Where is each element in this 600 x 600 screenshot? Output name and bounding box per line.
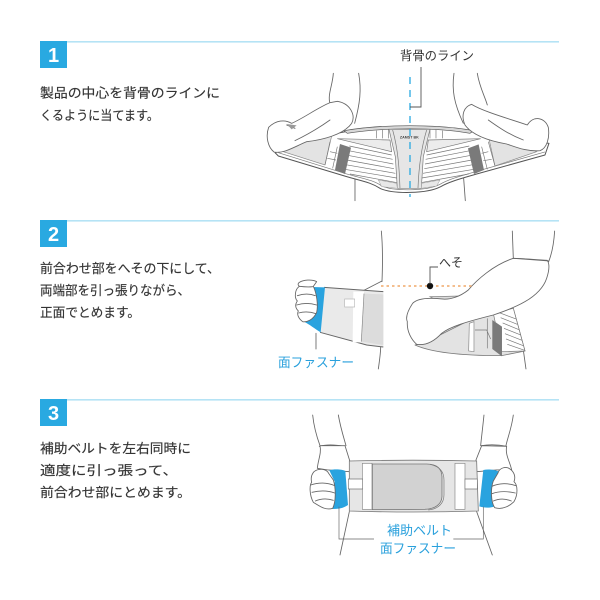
left fist [310,469,335,509]
step 1 number badge [40,41,67,68]
belt [349,460,478,512]
step 2 number badge [40,220,67,247]
step 3 instruction text: 適度に引っ張って、 [40,463,178,478]
upper hands [317,446,350,472]
panel: step 3 [40,399,559,556]
navel leader line [430,267,438,284]
panel: step 2 [40,220,559,370]
right fist [491,468,517,508]
step 2 instruction text: 両端部を引っ張りながら、 [40,283,190,298]
step 3 instruction text [40,441,191,500]
step 3 instruction text: 補助ベルトを左右同時に [40,441,191,456]
step 1 instruction text: 製品の中心を背骨のラインに [40,86,220,100]
belt body: ZAMST BK [400,136,419,140]
navel dotted line [381,285,474,287]
step 3 number badge: 3 [48,403,59,425]
label: fastener, blue: 面ファスナー [380,541,456,556]
illustration: pulling support belts, front view [310,415,517,555]
illustration: fastening the belt, side view [295,231,555,369]
navel dot [427,283,433,289]
right arm [463,104,549,151]
illustration: belt on back aligned to spine [267,73,549,201]
step 2 instruction text [40,261,220,320]
step 1 instruction text: くるように当てます。 [40,108,159,123]
step 3 number badge [40,399,67,426]
label: support belt, blue: 補助ベルト [387,523,452,538]
belt body [275,126,549,192]
support straps [348,479,363,489]
fastener leader lines [339,507,483,539]
blue fastener left [304,287,325,332]
step 1 instruction text [40,86,220,123]
spine leader line [410,67,421,107]
spine dashed line [409,77,411,197]
label: hook fastener, blue: 面ファスナー [278,355,354,370]
panel: step 1 [40,41,559,201]
right belt [415,308,525,356]
right arm and fist [407,258,549,345]
left arm [267,101,353,152]
step 2 instruction text: 正面でとめます。 [40,305,140,320]
label: navel: へそ [439,256,463,270]
label: spine line: 背骨のライン [400,49,474,63]
belly band bit [430,296,460,303]
blue fasteners [329,469,348,509]
step 2 number badge: 2 [48,224,59,246]
step 2 instruction text: 前合わせ部をへその下にして、 [40,261,220,276]
step 3 instruction text: 前合わせ部にとめます。 [40,485,191,500]
left belt end [320,287,383,347]
left hand [295,280,317,322]
step 1 number badge: 1 [48,45,59,67]
